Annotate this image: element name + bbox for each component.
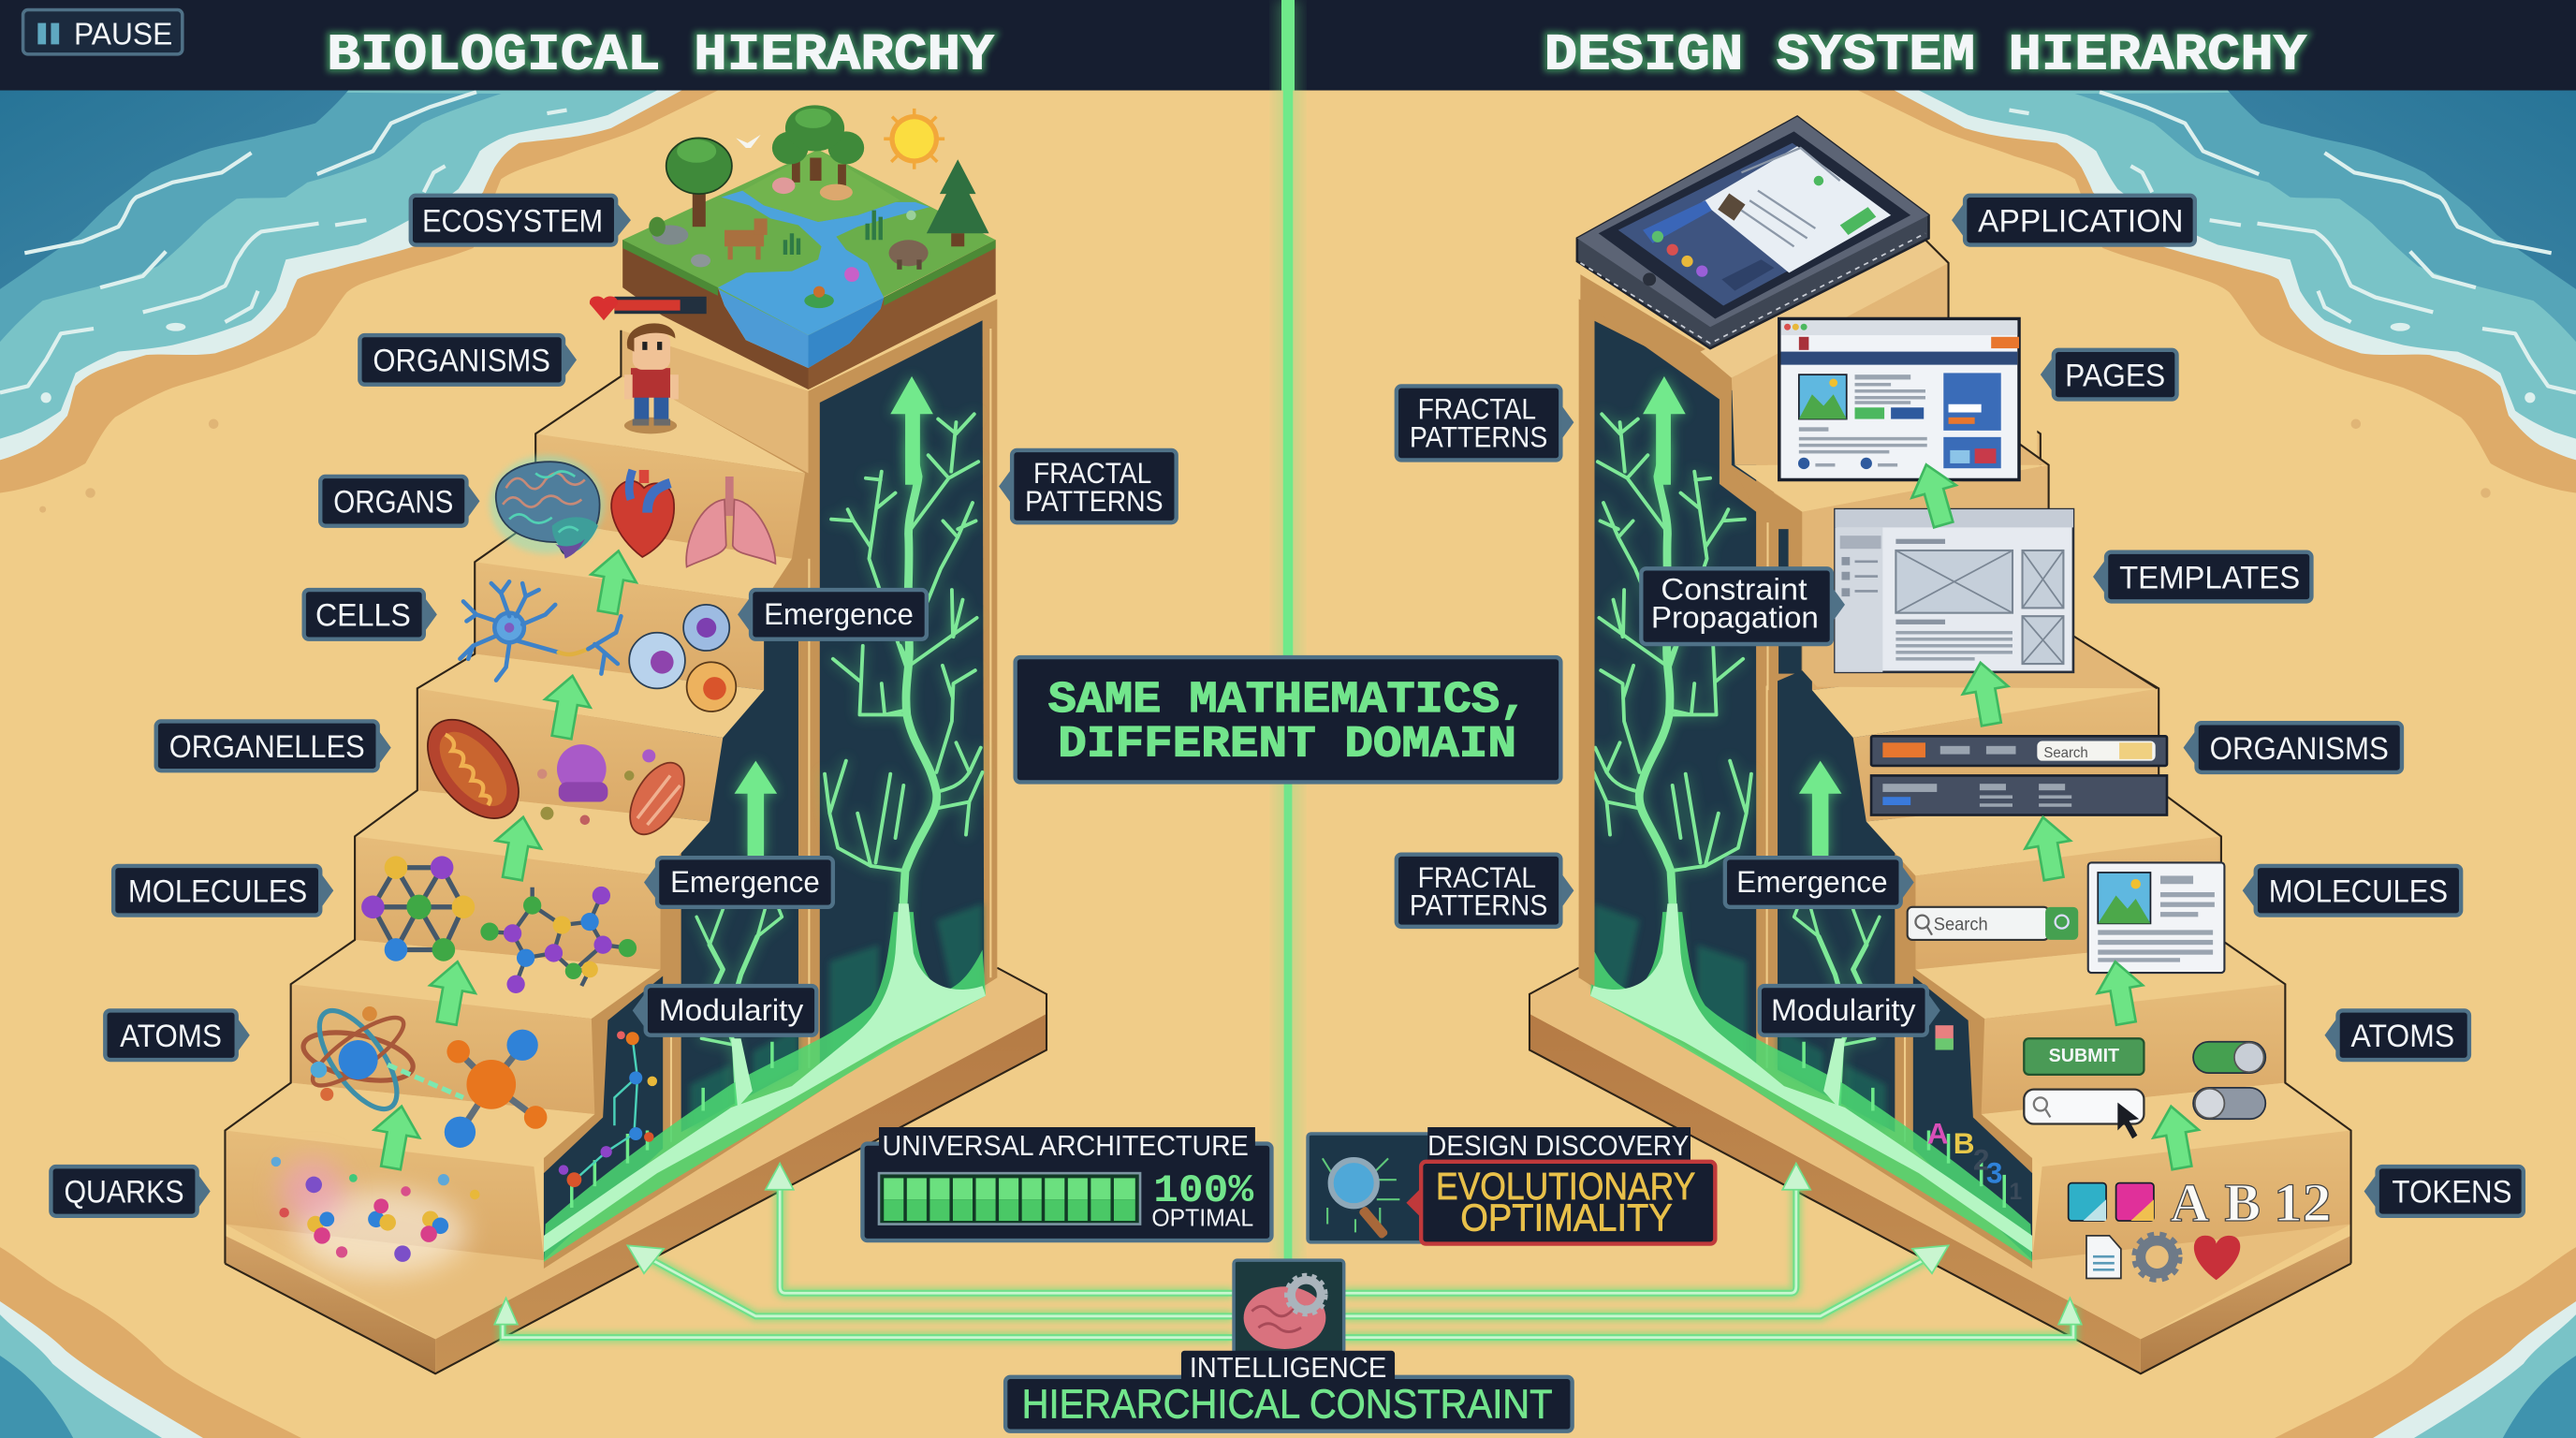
icon: toggles [2193,1042,2265,1119]
title: design system hierarchy: DESIGN SYSTEM HIERARCHY [1544,28,2307,85]
label: organisms: ORGANISMS [373,344,550,379]
label: emergence right [1725,858,1914,907]
label: organisms right [2184,723,2402,772]
right upper staircase block [1579,240,2157,986]
arrows: left staircase [368,547,641,1172]
label: emergence lower left: Emergence [670,865,820,899]
label: fractal patterns left [999,450,1177,522]
label: cells [304,590,437,639]
panel: universal architecture meter [862,1127,1271,1240]
label: atoms right: ATOMS [2351,1019,2454,1054]
panel: hierarchical constraint: HIERARCHICAL CONSTRAINT [1022,1382,1553,1428]
icon: template wireframe [1835,509,2073,672]
panel: design discovery: DESIGN DISCOVERY [1427,1129,1689,1162]
icon: card molecule [2088,862,2224,973]
label: cells: CELLS [315,598,411,634]
icon: vesicle and golgi [537,744,695,844]
right panel tokens on dark wall: 1 [2009,1180,2022,1205]
label: fractal patterns lower right [1397,855,1573,927]
label: constraint propagation: Propagation [1651,600,1819,634]
arrows: right staircase [1904,459,2204,1172]
title: design system hierarchy: DESIGN SYSTEM HIERARCHY [1544,28,2307,85]
label: atoms: ATOMS [120,1019,222,1054]
icon: design tokens: B [2224,1172,2261,1233]
label: quarks [51,1167,211,1216]
header bar [0,0,2576,91]
right panel tokens on dark wall: 3 [1986,1156,2002,1190]
label: ecosystem [411,196,631,245]
label: organisms [359,335,577,385]
label: tokens: TOKENS [2392,1175,2512,1211]
icon: organism character [624,323,679,433]
pause button [23,10,183,54]
label: emergence upper left: Emergence [764,597,914,631]
icon: input and cursor [2024,1090,2144,1138]
icon: molecule lattice [361,856,475,961]
icon: health bar [590,296,707,320]
callout: same mathematics: DIFFERENT DOMAIN [1058,720,1516,770]
label: organs [320,477,479,526]
icon: lungs [686,477,775,567]
label: molecules right: MOLECULES [2269,874,2448,910]
label: fractal patterns left: FRACTAL [1033,456,1151,490]
label: organelles [156,721,391,770]
panel: universal architecture meter: UNIVERSAL ARCHITECTURE [882,1129,1249,1162]
label: molecules right [2243,866,2461,916]
label: templates: TEMPLATES [2119,560,2300,595]
label: organisms right: ORGANISMS [2210,731,2389,767]
label: fractal patterns lower right: PATTERNS [1410,888,1547,922]
ocean and shoreline: left [0,91,718,1438]
left panel molecules on dark wall [559,1031,657,1187]
icon: tablet application [1577,117,1928,348]
icon: submit button [2024,1038,2144,1075]
icon: search molecule: Search [1934,915,1988,934]
label: ecosystem: ECOSYSTEM [422,203,603,239]
panel: universal architecture meter: OPTIMAL [1151,1205,1253,1231]
label: organelles: ORGANELLES [169,729,365,765]
icon: cells [629,605,736,712]
label: atoms right [2324,1010,2469,1060]
panel: design discovery: EVOLUTIONARY [1436,1165,1695,1208]
panel: hierarchical constraint: INTELLIGENCE [1190,1351,1386,1384]
label: emergence lower left [644,858,833,907]
icon: submit button: SUBMIT [2049,1046,2120,1066]
icon: phosphate molecule [445,1030,547,1148]
label: modularity left [633,986,816,1035]
label: fractal patterns upper right [1397,386,1573,460]
icon: page layout window [1779,318,2019,479]
label: quarks: QUARKS [64,1175,184,1211]
icon: organism footer bar [1871,775,2167,815]
label: application: APPLICATION [1978,203,2184,239]
title: biological hierarchy: BIOLOGICAL HIERARCHY [327,28,994,85]
panel: design discovery: OPTIMALITY [1460,1196,1673,1240]
label: atoms [105,1010,250,1060]
sand specks [39,419,2491,513]
centre divider line [1277,0,1299,1267]
icon: intelligence brain [1234,1260,1344,1358]
icon: mitochondrion [410,703,536,835]
label: molecules: MOLECULES [128,874,307,910]
label: pages: PAGES [2065,358,2165,393]
icon: molecule chain [480,887,637,993]
connector lines: right [1344,1164,2082,1338]
icon: design tokens: 12 [2274,1172,2331,1233]
right panel tokens on dark wall: B [1954,1126,1975,1160]
label: constraint propagation: Constraint [1661,573,1808,607]
panel: hierarchical constraint [1005,1351,1573,1431]
icon: organism nav bar [1871,736,2167,766]
label: constraint propagation [1641,568,1845,644]
icon: heart [611,470,674,557]
panel: right staircase [1530,299,2351,1373]
right panel tokens on dark wall: A [1927,1117,1949,1151]
icon: design tokens [2069,1172,2331,1280]
label: tokens [2364,1167,2524,1216]
label: modularity right: Modularity [1771,993,1916,1027]
label: organs: ORGANS [333,485,453,521]
label: emergence upper left [738,590,927,639]
icon: search molecule [1908,907,2078,940]
callout: same mathematics: SAME MATHEMATICS, [1048,676,1528,726]
label: templates [2093,552,2311,601]
label: modularity right [1760,986,1940,1035]
icon: ecosystem block [622,105,996,389]
icon: organism nav bar: Search [2043,745,2088,761]
label: molecules [113,866,333,916]
right panel tokens on dark wall: 2 [1973,1143,1989,1177]
label: fractal patterns left: PATTERNS [1025,484,1164,518]
icon: atom [299,999,463,1121]
ocean and shoreline: right [1858,91,2576,1438]
label: fractal patterns lower right: FRACTAL [1418,860,1536,894]
panel: design discovery [1308,1127,1715,1244]
label: application [1952,196,2195,245]
icon: neuron [460,581,621,681]
icon: brain [490,455,605,559]
callout: same mathematics [1016,657,1560,782]
panel: universal architecture meter: 100% [1153,1168,1254,1213]
right panel tokens on dark wall [1927,1025,2022,1205]
title: biological hierarchy: BIOLOGICAL HIERARCHY [327,28,994,85]
label: fractal patterns upper right: PATTERNS [1410,419,1547,453]
connector lines: left [494,1164,1232,1338]
icon: design tokens: A [2170,1172,2209,1233]
label: fractal patterns upper right: FRACTAL [1418,392,1536,426]
label: modularity left: Modularity [659,993,804,1027]
label: emergence right: Emergence [1736,865,1888,899]
icon: quarks [271,1157,479,1275]
pause button: PAUSE [74,17,172,51]
label: pages [2041,350,2177,399]
panel: left staircase [225,299,1046,1373]
